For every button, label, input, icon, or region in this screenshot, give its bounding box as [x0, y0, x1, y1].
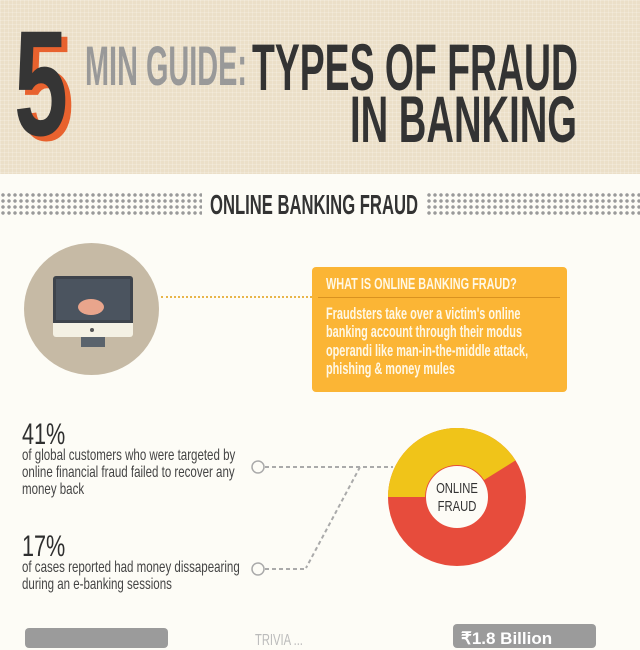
stat: 41%: online financial fraud failed to recover any [22, 464, 235, 481]
stat: 17%: of cases reported had money dissapearing [22, 559, 240, 576]
subtitle MIN GUIDE: MIN GUIDE: [85, 34, 247, 97]
donut chart: online fraud [388, 428, 526, 566]
icon: monitor with piggy bank [24, 243, 159, 375]
big number 5: 5 [20, 4, 74, 172]
text: TRIVIA ... [255, 632, 303, 649]
callout: what is online banking fraud: operandi like man-in-the-middle attack, [326, 342, 528, 360]
donut chart: online fraud: FRAUD [438, 497, 476, 514]
stat: 41%: of global customers who were targeted by [22, 447, 235, 464]
header band [0, 0, 640, 174]
callout: what is online banking fraud [312, 267, 567, 392]
big number 5: 5 [14, 0, 68, 167]
text: ₹1.8 Billion [461, 629, 552, 648]
stat: 17%: 17% [22, 530, 65, 563]
stat: 41% [22, 418, 236, 498]
bottom boxes [25, 628, 168, 648]
callout: what is online banking fraud: banking account through their modus [326, 323, 522, 341]
donut chart: online fraud: ONLINE [436, 479, 478, 496]
title [252, 30, 578, 156]
stat: 17% [22, 530, 240, 593]
stat: 41%: money back [22, 481, 84, 498]
callout: what is online banking fraud: WHAT IS ONLINE BANKING FRAUD? [326, 276, 517, 293]
stat: 41%: 41% [22, 418, 65, 451]
callout: what is online banking fraud: Fraudsters take over a victim's online [326, 305, 520, 323]
stat: 17%: during an e-banking sessions [22, 576, 172, 593]
callout: what is online banking fraud: phishing & money mules [326, 360, 455, 378]
header text [14, 0, 578, 172]
connector dotted line [161, 296, 312, 298]
section heading with dot bands [1, 192, 640, 216]
